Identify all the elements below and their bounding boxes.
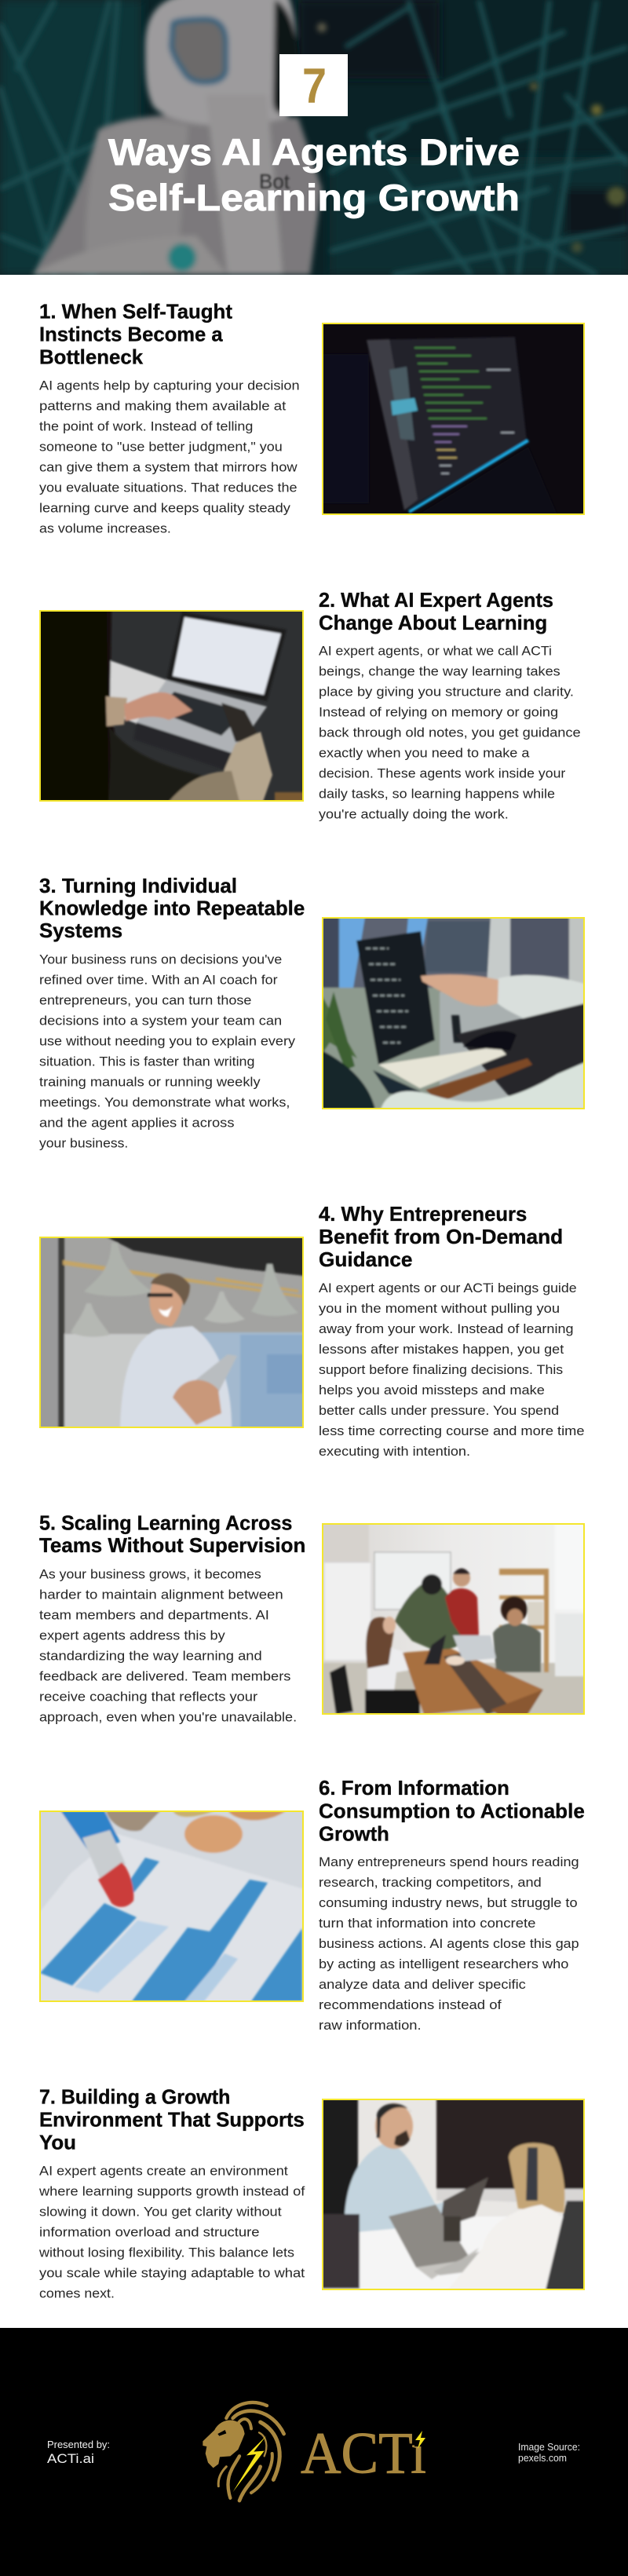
heading 7: [39, 2085, 305, 2154]
heading 2: [319, 588, 553, 634]
body text 1: someone to "use better judgment," you: [39, 439, 283, 454]
body text 2: AI expert agents, or what we call ACTi: [319, 644, 552, 659]
body text 5: approach, even when you're unavailable.: [39, 1710, 297, 1725]
body text 4: better calls under pressure. You spend: [319, 1403, 559, 1418]
heading 4: Benefit from On-Demand: [319, 1225, 563, 1248]
body text 7: [38, 2164, 305, 2301]
body text 3: your business.: [39, 1136, 128, 1151]
body text 1: as volume increases.: [39, 521, 171, 535]
body text 3: situation. This is faster than writing: [39, 1054, 254, 1069]
heading 1: [39, 300, 232, 369]
section 5: [39, 1511, 585, 1725]
heading 7: Environment That Supports: [39, 2108, 305, 2132]
section 3: [39, 874, 585, 1151]
body text 2: you're actually doing the work.: [319, 807, 509, 822]
heading 3: Systems: [39, 919, 122, 942]
heading 6: 6. From Information: [319, 1776, 509, 1800]
body text 6: research, tracking competitors, and: [319, 1875, 542, 1890]
heading 1: Instincts Become a: [39, 323, 223, 346]
body text 7: AI expert agents create an environment: [39, 2164, 288, 2179]
body text 4: support before finalizing decisions. This: [319, 1362, 563, 1377]
heading 1: Bottleneck: [39, 345, 144, 369]
body text 5: team members and departments. AI: [39, 1608, 269, 1623]
image source: Image Source:: [518, 2441, 580, 2453]
heading 3: Knowledge into Repeatable: [39, 897, 305, 920]
body text 4: away from your work. Instead of learning: [319, 1321, 573, 1336]
number badge: [279, 54, 348, 116]
body text 2: Instead of relying on memory or going: [319, 705, 558, 720]
body text 2: [319, 644, 581, 822]
body text 5: [39, 1567, 297, 1725]
body text 4: AI expert agents or our ACTi beings guide: [319, 1281, 577, 1295]
heading 2: 2. What AI Expert Agents: [319, 588, 553, 612]
heading 6: [319, 1776, 585, 1845]
heading 4: [319, 1202, 563, 1271]
body text 3: use without needing you to explain every: [39, 1034, 296, 1049]
body text 4: less time correcting course and more time: [319, 1423, 584, 1438]
presented by: [47, 2439, 110, 2466]
body text 5: harder to maintain alignment between: [39, 1588, 283, 1602]
body text 3: refined over time. With an AI coach for: [39, 973, 278, 988]
heading 4: Guidance: [319, 1248, 412, 1271]
body text 5: receive coaching that reflects your: [39, 1690, 257, 1705]
body text 6: recommendations instead of: [319, 1997, 502, 2012]
body text 7: you scale while staying adaptable to what: [39, 2266, 305, 2281]
body text 7: where learning supports growth instead of: [38, 2184, 305, 2199]
body text 6: [319, 1854, 579, 2033]
photo: typing on laptop: [39, 610, 304, 802]
body text 2: back through old notes, you get guidance: [319, 725, 581, 740]
body text 6: Many entrepreneurs spend hours reading: [319, 1854, 579, 1869]
body text 5: expert agents address this by: [39, 1628, 225, 1643]
heading 2: Change About Learning: [319, 611, 547, 634]
body text 5: standardizing the way learning and: [39, 1649, 262, 1664]
body text 7: information overload and structure: [39, 2225, 260, 2240]
section 2: [39, 588, 581, 822]
logo wordmark: ACTi: [301, 2421, 426, 2486]
body text 4: helps you avoid missteps and make: [319, 1383, 545, 1398]
body text 3: Your business runs on decisions you've: [39, 952, 282, 967]
body text 4: executing with intention.: [319, 1444, 470, 1459]
body text 2: beings, change the way learning takes: [319, 664, 560, 679]
body text 7: comes next.: [39, 2286, 115, 2301]
heading 1: 1. When Self-Taught: [39, 300, 232, 323]
main title: [108, 131, 520, 218]
photo: code on monitor: [322, 323, 585, 515]
body text 2: exactly when you need to make a: [319, 746, 530, 761]
hero background: robot and network: [0, 0, 628, 275]
body text 1: you evaluate situations. That reduces the: [39, 480, 298, 495]
robot chest lettering: Bot: [259, 170, 290, 193]
photo: laughing man with tablet: [39, 1237, 304, 1428]
body text 4: you in the moment without pulling you: [319, 1301, 560, 1316]
body text 1: can give them a system that mirrors how: [39, 459, 298, 474]
image source: [518, 2441, 580, 2464]
hero header: [0, 0, 628, 275]
body text 3: [39, 952, 296, 1151]
section 7: [38, 2085, 585, 2301]
icon: lion head: [203, 2402, 284, 2501]
body text 1: AI agents help by capturing your decision: [39, 378, 300, 393]
heading 6: Growth: [319, 1821, 389, 1845]
heading 6: Consumption to Actionable: [319, 1800, 585, 1823]
footer: [0, 2328, 628, 2576]
section 1: [39, 300, 585, 535]
heading 7: 7. Building a Growth: [39, 2085, 230, 2109]
section 4: [39, 1202, 584, 1459]
body text 3: and the agent applies it across: [39, 1116, 234, 1131]
icon: small lightning: [414, 2429, 427, 2449]
main title: Ways AI Agents Drive: [108, 131, 520, 173]
body text 2: decision. These agents work inside your: [319, 766, 566, 781]
body text 1: learning curve and keeps quality steady: [39, 500, 290, 515]
photo: team around wooden table: [322, 1523, 585, 1715]
body text 4: [319, 1281, 584, 1459]
section 6: [39, 1776, 585, 2033]
presented by: ACTi.ai: [47, 2451, 94, 2466]
image source: pexels.com: [518, 2452, 567, 2464]
heading 5: [39, 1511, 305, 1557]
main title: Self-Learning Growth: [108, 177, 520, 218]
logo: ACTi lion: [203, 2402, 427, 2501]
body text 5: As your business grows, it becomes: [39, 1567, 261, 1582]
body text 7: slowing it down. You get clarity without: [39, 2205, 282, 2220]
body text 7: without losing flexibility. This balance lets: [38, 2245, 294, 2260]
photo: two colleagues with headsets: [322, 2099, 585, 2290]
body text 6: business actions. AI agents close this gap: [319, 1936, 579, 1951]
body text 5: feedback are delivered. Team members: [39, 1669, 290, 1684]
heading 4: 4. Why Entrepreneurs: [319, 1202, 527, 1226]
body text 3: entrepreneurs, you can turn those: [39, 993, 251, 1008]
body text 1: [39, 378, 300, 535]
number badge: 7: [302, 59, 327, 114]
heading 3: [39, 874, 305, 942]
body text 6: analyze data and deliver specific: [319, 1977, 526, 1992]
photo: pointing at code on tablet: [322, 917, 585, 1109]
body text 2: daily tasks, so learning happens while: [319, 787, 555, 802]
heading 7: You: [39, 2130, 76, 2154]
heading 3: 3. Turning Individual: [39, 874, 237, 897]
body text 3: training manuals or running weekly: [39, 1075, 261, 1090]
body text 6: by acting as intelligent researchers who: [319, 1957, 568, 1971]
body text 1: the point of work. Instead of telling: [39, 418, 253, 433]
presented by: Presented by:: [47, 2439, 110, 2450]
body text 6: turn that information into concrete: [319, 1916, 535, 1931]
body text 3: meetings. You demonstrate what works,: [39, 1095, 290, 1110]
body text 2: place by giving you structure and clarity.: [319, 685, 574, 700]
heading 5: Teams Without Supervision: [39, 1533, 305, 1557]
body text 1: patterns and making them available at: [39, 398, 287, 413]
photo: pencil on bar chart with coins: [39, 1811, 304, 2002]
body text 6: raw information.: [319, 2018, 422, 2033]
body text 4: lessons after mistakes happen, you get: [319, 1342, 564, 1357]
body text 3: decisions into a system your team can: [39, 1014, 282, 1029]
heading 5: 5. Scaling Learning Across: [39, 1511, 292, 1534]
body text 6: consuming industry news, but struggle to: [319, 1895, 578, 1910]
